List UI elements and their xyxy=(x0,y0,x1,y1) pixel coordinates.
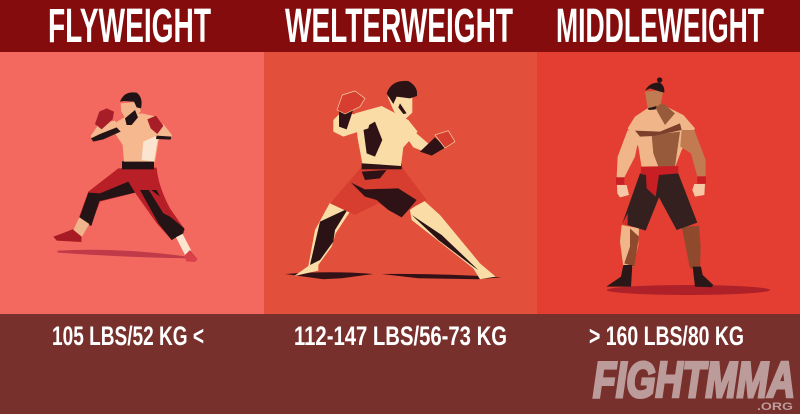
footer band xyxy=(0,314,800,414)
panel: flyweight xyxy=(0,52,264,314)
heading: welterweight: WELTERWEIGHT xyxy=(285,0,513,53)
header band xyxy=(0,0,800,52)
figure: flyweight fighter xyxy=(53,92,198,262)
weight label: flyweight: 105 LBS/52 KG < xyxy=(52,321,204,351)
figure: welterweight fighter xyxy=(285,81,502,279)
heading: flyweight: FLYWEIGHT xyxy=(48,0,211,53)
panel: middleweight xyxy=(537,52,800,314)
figure: middleweight fighter xyxy=(606,77,770,295)
logo: FightMMA.org: .ORG xyxy=(757,401,793,413)
weight label: middleweight: > 160 LBS/80 KG xyxy=(589,321,744,351)
panel: welterweight xyxy=(264,52,537,314)
weight label: welterweight: 112-147 LBS/56-73 KG xyxy=(294,321,507,351)
